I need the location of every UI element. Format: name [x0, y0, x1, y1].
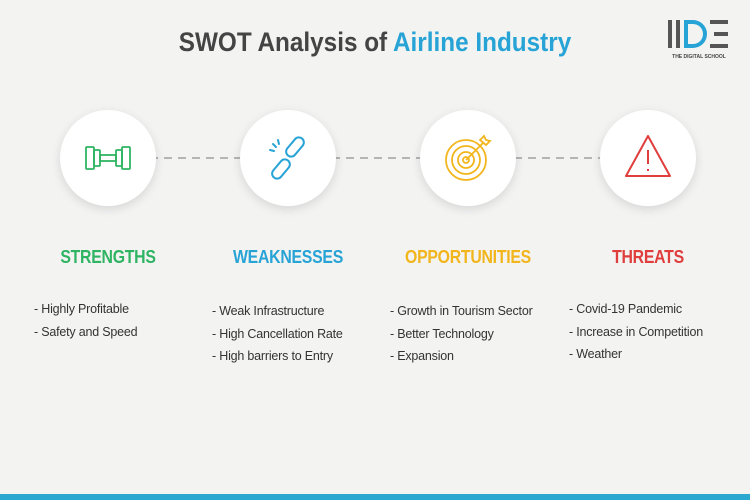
list: weaknesses: - High barriers to Entry — [212, 349, 333, 363]
list: weaknesses — [212, 304, 343, 363]
icon: dumbbell — [60, 110, 156, 206]
heading: weaknesses: WEAKNESSES — [233, 247, 343, 267]
icon: broken chain — [240, 110, 336, 206]
heading: opportunities: OPPORTUNITIES — [405, 247, 531, 267]
list: strengths: - Safety and Speed — [34, 324, 137, 338]
bottom bar — [0, 494, 750, 500]
logo — [668, 20, 728, 60]
icon: warning — [600, 110, 696, 206]
list: strengths: - Highly Profitable — [34, 302, 129, 316]
dashed connector — [108, 157, 648, 159]
list: opportunities: - Expansion — [390, 349, 454, 363]
list: opportunities — [390, 304, 533, 363]
icon: target — [420, 110, 516, 206]
list: threats — [569, 302, 703, 361]
list: strengths — [34, 302, 137, 338]
list: threats: - Covid-19 Pandemic — [569, 302, 682, 316]
title: SWOT Analysis of Airline Industry — [179, 27, 571, 57]
logo: THE DIGITAL SCHOOL — [672, 54, 726, 60]
list: weaknesses: - Weak Infrastructure — [212, 304, 324, 318]
list: threats: - Weather — [569, 347, 622, 361]
list: opportunities: - Growth in Tourism Sector — [390, 304, 533, 318]
heading: strengths: STRENGTHS — [60, 247, 156, 267]
list: opportunities: - Better Technology — [390, 326, 494, 340]
list: weaknesses: - High Cancellation Rate — [212, 326, 343, 340]
heading: threats: THREATS — [612, 247, 684, 267]
list: threats: - Increase in Competition — [569, 324, 703, 338]
